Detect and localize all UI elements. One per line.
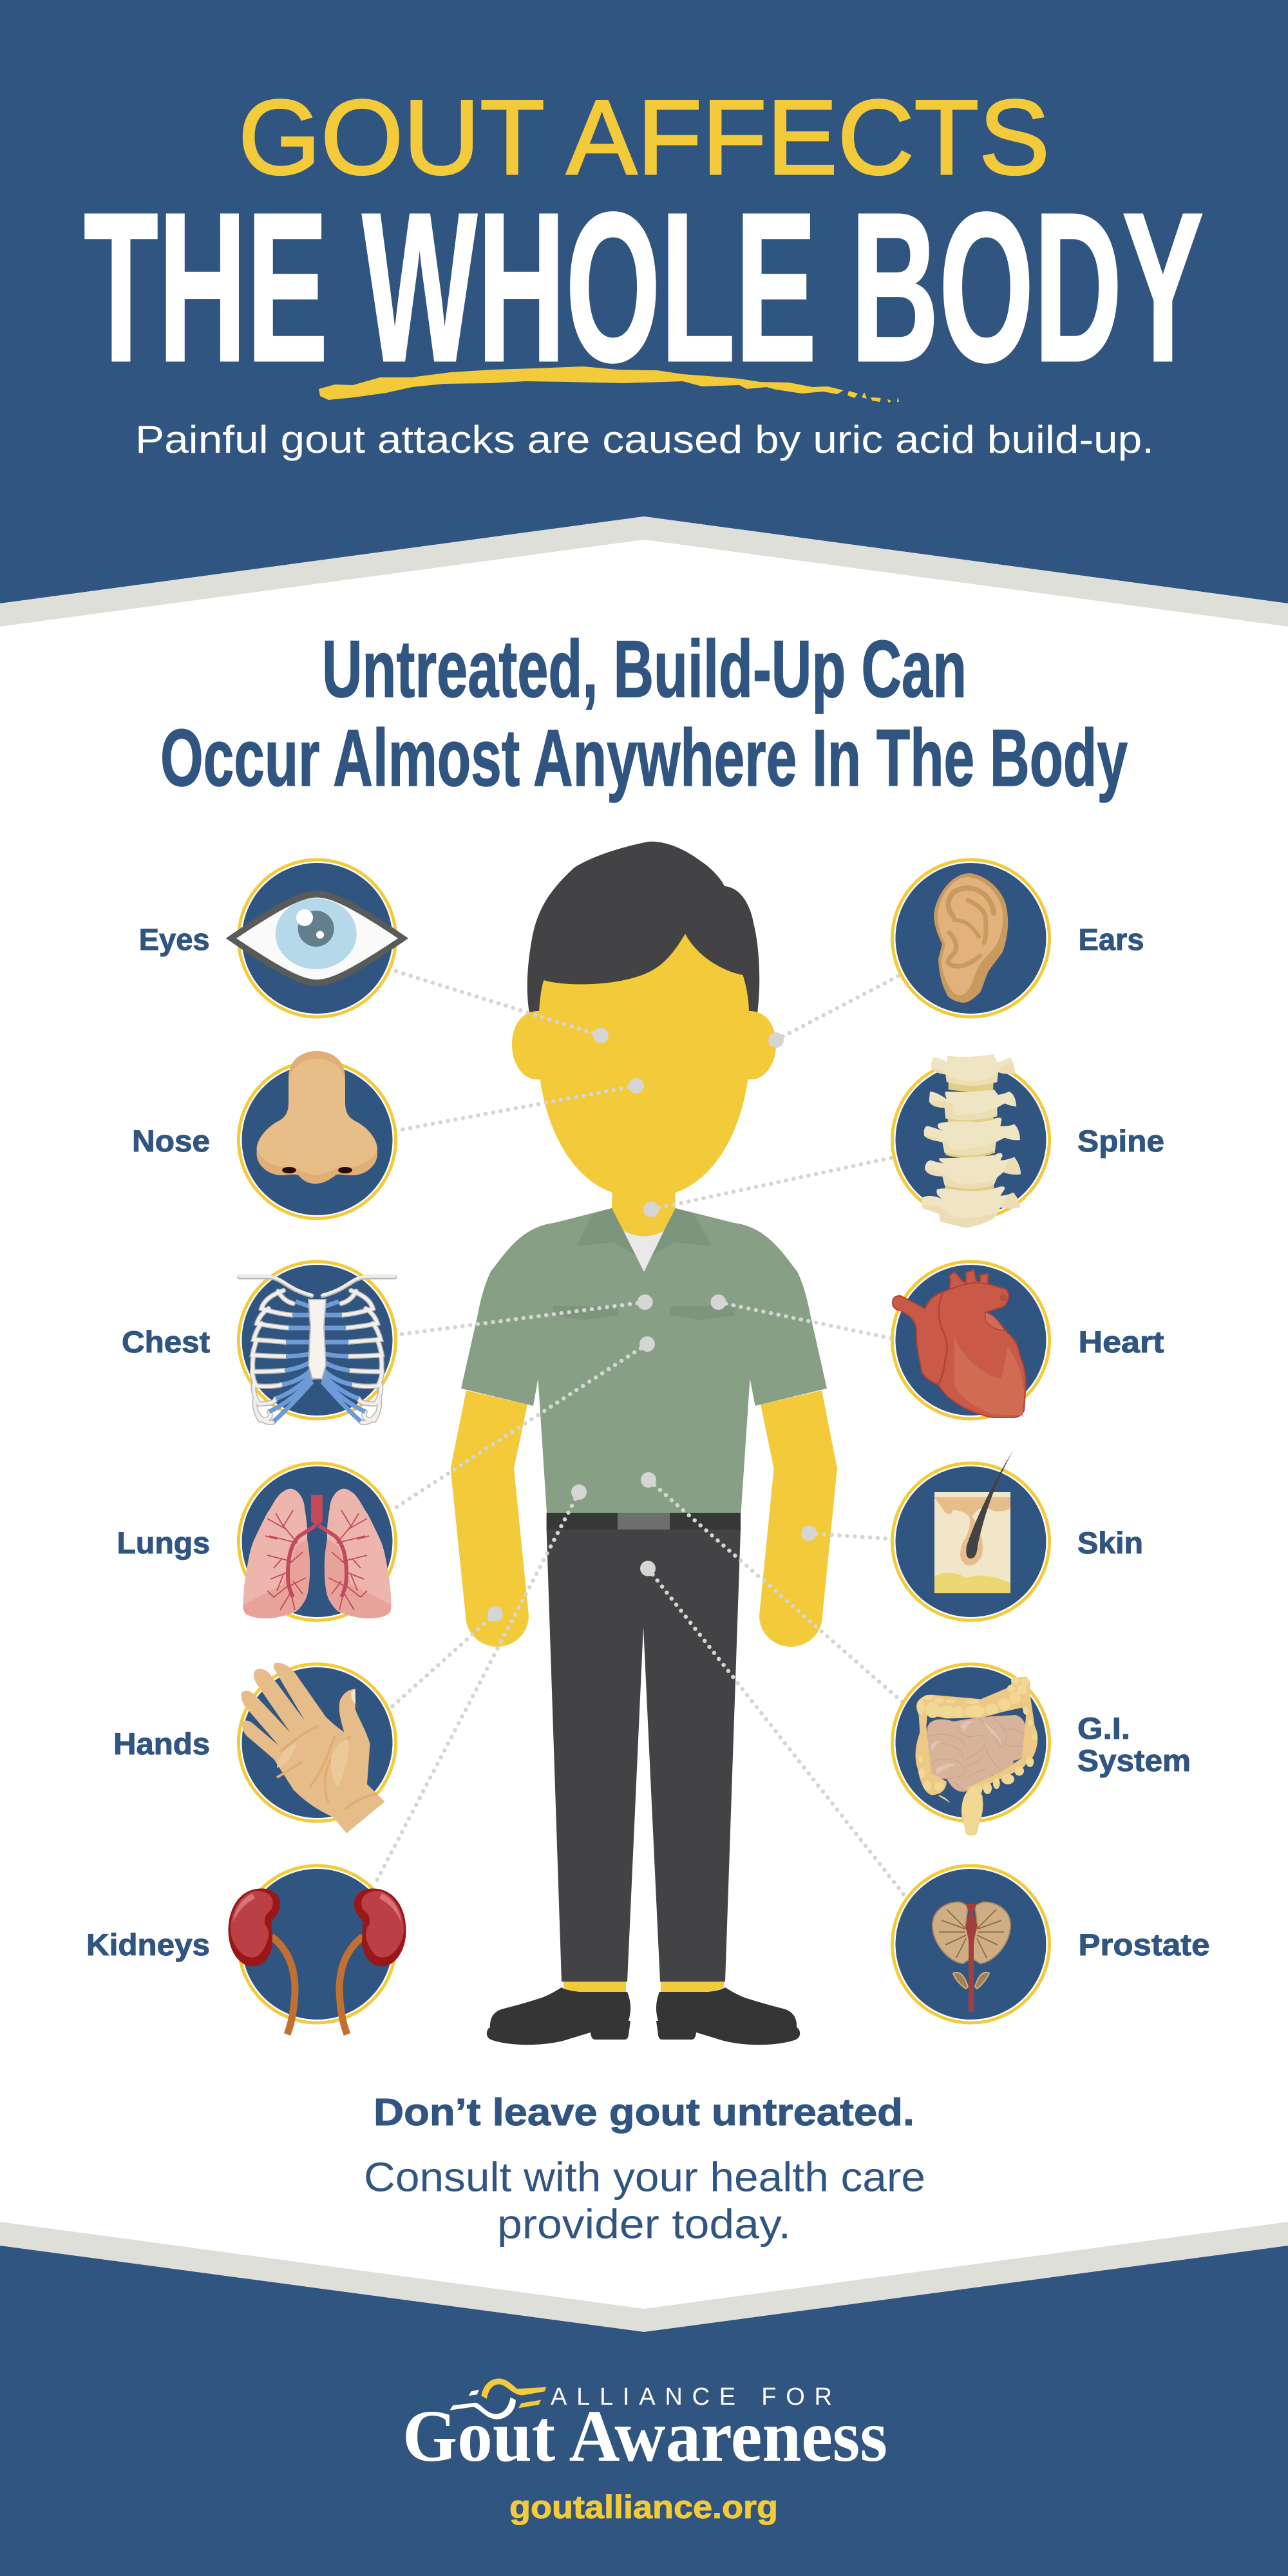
website url: goutalliance.org	[509, 2489, 778, 2525]
person figure	[451, 842, 837, 2045]
icon: prostate	[933, 1902, 1010, 2012]
logo mark	[450, 2378, 546, 2420]
title line 1: GOUT AFFECTS	[238, 78, 1050, 196]
logo: Gout Awareness	[402, 2395, 887, 2477]
heading	[160, 625, 1128, 803]
icon: eye	[226, 891, 408, 986]
labels: left column: Chest	[122, 1325, 210, 1359]
icon: ear	[934, 873, 1008, 1003]
labels: left column: Kidneys	[86, 1927, 210, 1962]
labels: right column: Ears	[1078, 922, 1144, 956]
ears	[512, 1011, 776, 1079]
labels: right column: System	[1077, 1743, 1191, 1777]
belt	[547, 1513, 741, 1530]
labels: left column	[86, 922, 210, 1962]
arms	[451, 1390, 837, 1647]
panel: header	[0, 0, 1288, 627]
panel: footer	[0, 2222, 1288, 2576]
icon: skin	[934, 1450, 1014, 1593]
icon: hand	[242, 1663, 385, 1833]
neck and undershirt	[612, 1185, 676, 1272]
heading: Untreated, Build-Up Can	[322, 625, 967, 714]
icon: spine	[922, 1054, 1021, 1228]
brush underline	[319, 366, 899, 403]
call to action: provider today.	[497, 2201, 791, 2248]
icon: rib cage	[240, 1276, 395, 1423]
dotted connector lines and anchor dots	[376, 969, 906, 1896]
icon: kidneys	[228, 1888, 406, 2034]
socks	[564, 1982, 724, 1992]
hair	[527, 842, 759, 1024]
icon: lungs	[243, 1489, 392, 1618]
pockets	[553, 1306, 735, 1320]
call to action	[364, 2091, 925, 2248]
labels: right column: Heart	[1078, 1325, 1164, 1359]
shoes	[487, 1987, 800, 2045]
labels: left column: Eyes	[139, 922, 210, 956]
call to action: Consult with your health care	[364, 2154, 925, 2200]
shirt	[461, 1208, 827, 1513]
collar	[576, 1208, 712, 1272]
labels: right column: Skin	[1077, 1526, 1143, 1560]
labels: right column: Prostate	[1078, 1927, 1209, 1962]
call to action: Don’t leave gout untreated.	[374, 2091, 914, 2134]
labels: right column: G.I.	[1077, 1711, 1130, 1745]
icon: heart	[893, 1270, 1026, 1417]
subtitle: Painful gout attacks are caused by uric acid build-up.	[135, 418, 1154, 461]
icon: nose	[256, 1051, 377, 1184]
icon: G.I. system	[916, 1676, 1037, 1835]
icon discs	[238, 860, 1050, 2023]
trousers	[547, 1530, 741, 1982]
labels: right column	[1077, 922, 1209, 1962]
labels: left column: Hands	[113, 1727, 210, 1761]
labels: left column: Lungs	[117, 1526, 210, 1560]
labels: right column: Spine	[1077, 1124, 1164, 1158]
organisation name: ALLIANCE FOR	[551, 2383, 832, 2410]
face	[538, 934, 749, 1193]
labels: left column: Nose	[132, 1124, 210, 1158]
